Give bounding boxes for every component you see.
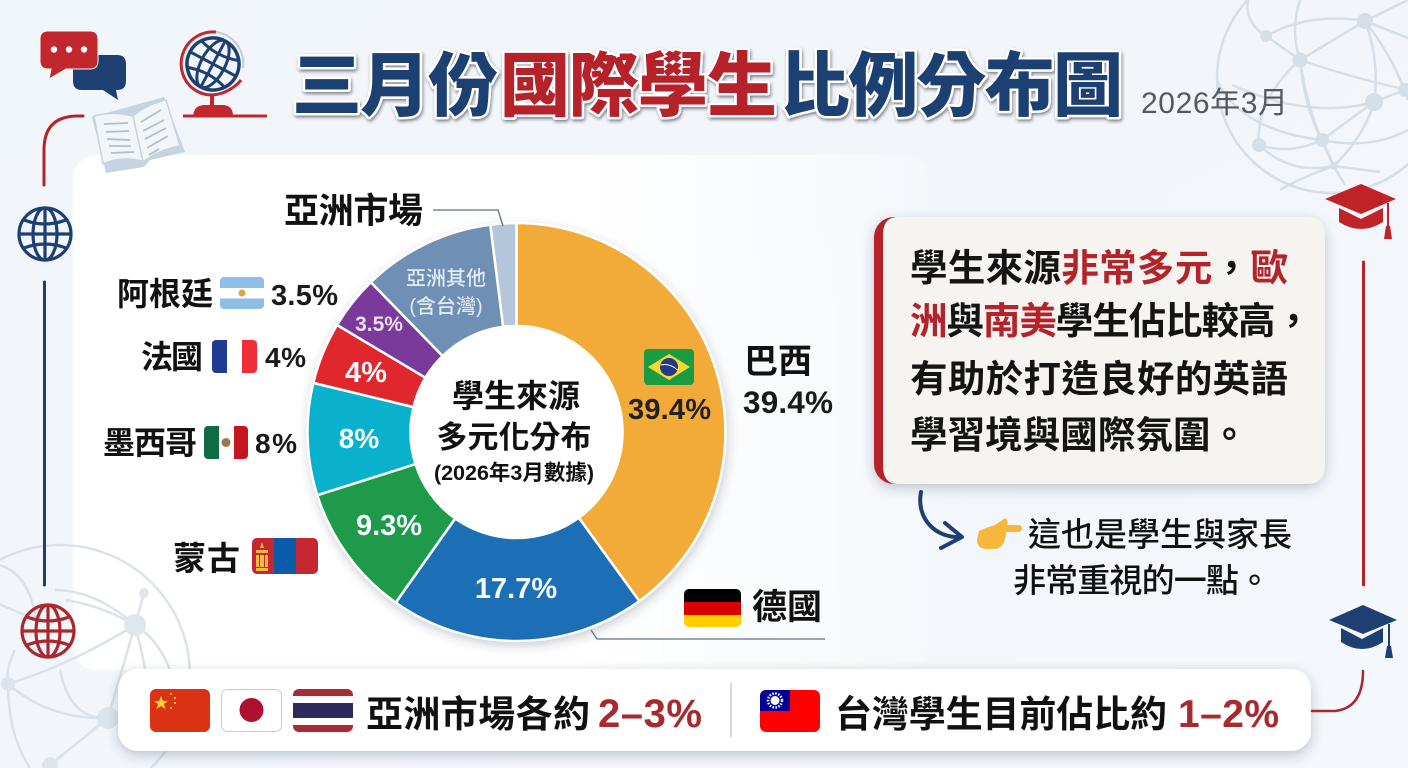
icon: red graduation cap — [1325, 184, 1396, 239]
callout text: 有助於打造良好的英語 — [910, 358, 1288, 400]
icon: speech bubbles — [40, 31, 126, 100]
segment: Mongolia 9.3% — [317, 464, 455, 603]
label: Argentina — [119, 277, 338, 309]
segment labels: 4% — [345, 357, 387, 389]
donut centre text — [434, 378, 594, 485]
bottom bar: 2–3% — [598, 692, 702, 736]
segment: Mexico 8% — [307, 383, 416, 495]
icon: navy globe — [19, 208, 71, 260]
title — [292, 47, 1123, 125]
segment: Germany 17.7% — [396, 518, 639, 641]
donut centre text: 學生來源 — [452, 378, 580, 414]
label: Mongolia: 蒙古 — [173, 540, 240, 577]
title: 國際學生 — [500, 47, 777, 125]
segment labels: 9.3% — [356, 510, 422, 542]
icon: globe on stand — [178, 29, 267, 116]
label: Germany — [591, 588, 825, 639]
donut centre text: (2026年3月數據) — [434, 461, 594, 485]
donut chart — [306, 222, 726, 642]
label: France: 4% — [265, 342, 306, 373]
label: Mongolia — [173, 538, 318, 577]
note text — [1013, 516, 1292, 599]
segment labels: 3.5% — [355, 313, 403, 336]
label: Mexico: 墨西哥 — [103, 425, 197, 461]
segment labels: 17.7% — [475, 573, 557, 605]
label: Brazil: 39.4% — [743, 384, 833, 420]
label: France — [141, 339, 306, 375]
date: 2026年3月 — [1141, 87, 1288, 120]
segment labels: 8% — [339, 423, 379, 454]
callout text: 洲與南美學生佔比較高， — [910, 300, 1312, 342]
connector: right red line — [1362, 262, 1365, 585]
label: Asia market — [284, 192, 503, 231]
text: Asia market share: 亞洲市場各約 — [366, 694, 590, 735]
icon: Taiwan flag — [760, 690, 820, 732]
title: 三月份 — [292, 47, 498, 125]
connector: bottom right red curve — [1312, 671, 1363, 711]
arrow: callout to note — [920, 492, 962, 548]
segment: France 4% — [313, 325, 425, 407]
bottom bar — [118, 669, 1311, 751]
label: Germany: 德國 — [752, 588, 822, 627]
label: Brazil: 巴西 — [744, 343, 812, 381]
donut centre text: 多元化分布 — [436, 420, 592, 455]
segment: other Asia — [371, 225, 503, 356]
segment: Argentina 3.5% — [337, 282, 443, 378]
label: France: 法國 — [141, 339, 203, 375]
note text: 非常重視的一點。 — [1013, 562, 1271, 599]
callout panel — [874, 217, 1325, 484]
label: Argentina: 阿根廷 — [117, 276, 213, 312]
connector: left navy line — [43, 282, 46, 585]
segment: Asia market — [490, 223, 516, 327]
icon: open book — [92, 97, 185, 173]
title: 比例分布圖 — [780, 47, 1123, 125]
segment: Brazil 39.4% — [516, 223, 725, 601]
label: Brazil — [743, 343, 833, 420]
text: Taiwan share: 台灣學生目前佔比約 — [835, 694, 1167, 735]
label: Mexico — [103, 425, 297, 461]
note text: 這也是學生與家長 — [1028, 516, 1292, 553]
icon: China flag — [150, 689, 210, 732]
icon: navy graduation cap — [1329, 605, 1397, 658]
icon: pointing hand — [977, 518, 1022, 549]
label: Argentina: 3.5% — [271, 280, 338, 312]
callout text: 學習境與國際氛圍。 — [910, 414, 1248, 456]
icon: Japan flag — [222, 690, 282, 732]
icon: Thailand flag — [293, 689, 353, 732]
segment labels: 亞洲其他 — [406, 267, 486, 290]
segment labels: (含台灣) — [409, 295, 483, 318]
icon: red globe — [22, 605, 74, 657]
connector: top left red arc — [44, 116, 83, 185]
callout text: 學生來源非常多元，歐 — [910, 247, 1288, 289]
bottom bar: 1–2% — [1178, 693, 1279, 736]
label: Asia market: 亞洲市場 — [284, 192, 423, 231]
Brazil label inside donut: 39.4% — [628, 394, 711, 426]
Brazil label inside donut — [628, 349, 711, 426]
panel: chart background — [73, 155, 928, 670]
segment labels — [339, 267, 557, 605]
label: Mexico: 8% — [255, 428, 297, 459]
callout text — [910, 247, 1312, 456]
